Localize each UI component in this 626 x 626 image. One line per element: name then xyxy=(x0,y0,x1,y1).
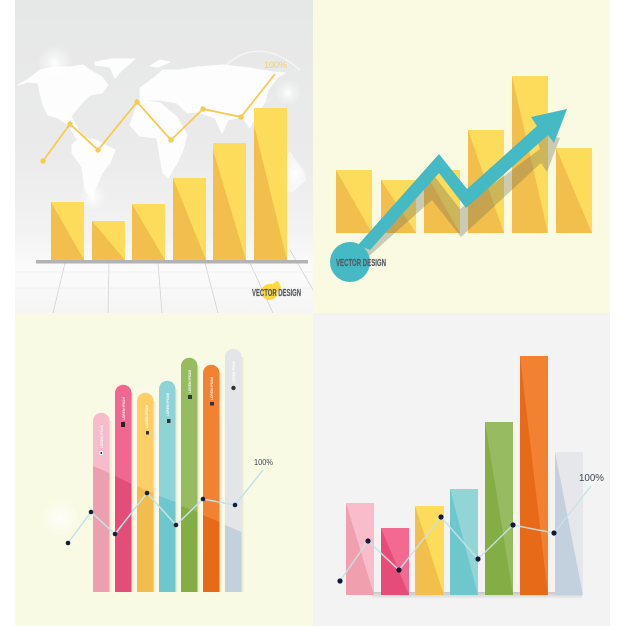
soft glows xyxy=(40,345,270,595)
arrow: teal xyxy=(330,109,567,282)
label: 100%: 100% xyxy=(254,457,273,467)
bar: magenta xyxy=(115,385,132,592)
arrow shadow xyxy=(360,131,560,257)
bar label: LOREM IPSUM xyxy=(231,360,236,383)
bar: yellow xyxy=(137,393,154,592)
bar label: LOREM IPSUM xyxy=(165,392,170,416)
bar: grey xyxy=(225,349,242,592)
bar chart: yellow xyxy=(51,108,287,260)
line chart xyxy=(66,470,263,545)
label: 100%: 100% xyxy=(579,473,604,484)
bar shadows xyxy=(110,357,244,592)
logo: vector design: VECTOR DESIGN xyxy=(252,288,301,299)
bar label: LOREM IPSUM xyxy=(99,424,104,448)
light flares xyxy=(37,45,307,211)
bar: green xyxy=(181,358,198,592)
floor grid xyxy=(15,250,313,313)
floor shadow xyxy=(372,592,582,599)
logo: vector design xyxy=(252,281,301,300)
label: 100%: 100% xyxy=(264,60,288,71)
bar icons xyxy=(100,386,236,455)
bar chart: colours xyxy=(346,356,583,595)
panel: world map bar chart xyxy=(15,0,313,313)
bar chart: yellow xyxy=(336,76,592,233)
bar: teal xyxy=(159,381,176,592)
world map xyxy=(18,59,306,200)
bar label: LOREM IPSUM xyxy=(121,396,126,420)
bar: pink xyxy=(93,413,110,592)
panel: arrow bar chart xyxy=(313,0,610,313)
bar: orange xyxy=(203,365,220,592)
baseline xyxy=(36,260,308,264)
panel: rounded bars chart xyxy=(15,313,313,626)
bar label: LOREM IPSUM xyxy=(144,404,149,428)
label: vector design: VECTOR DESIGN xyxy=(336,258,386,269)
line chart xyxy=(337,486,591,584)
bar label: LOREM IPSUM xyxy=(187,369,192,393)
panel: colour bar chart xyxy=(313,313,610,626)
line chart: yellow xyxy=(40,74,275,164)
bar label: LOREM IPSUM xyxy=(209,376,214,400)
